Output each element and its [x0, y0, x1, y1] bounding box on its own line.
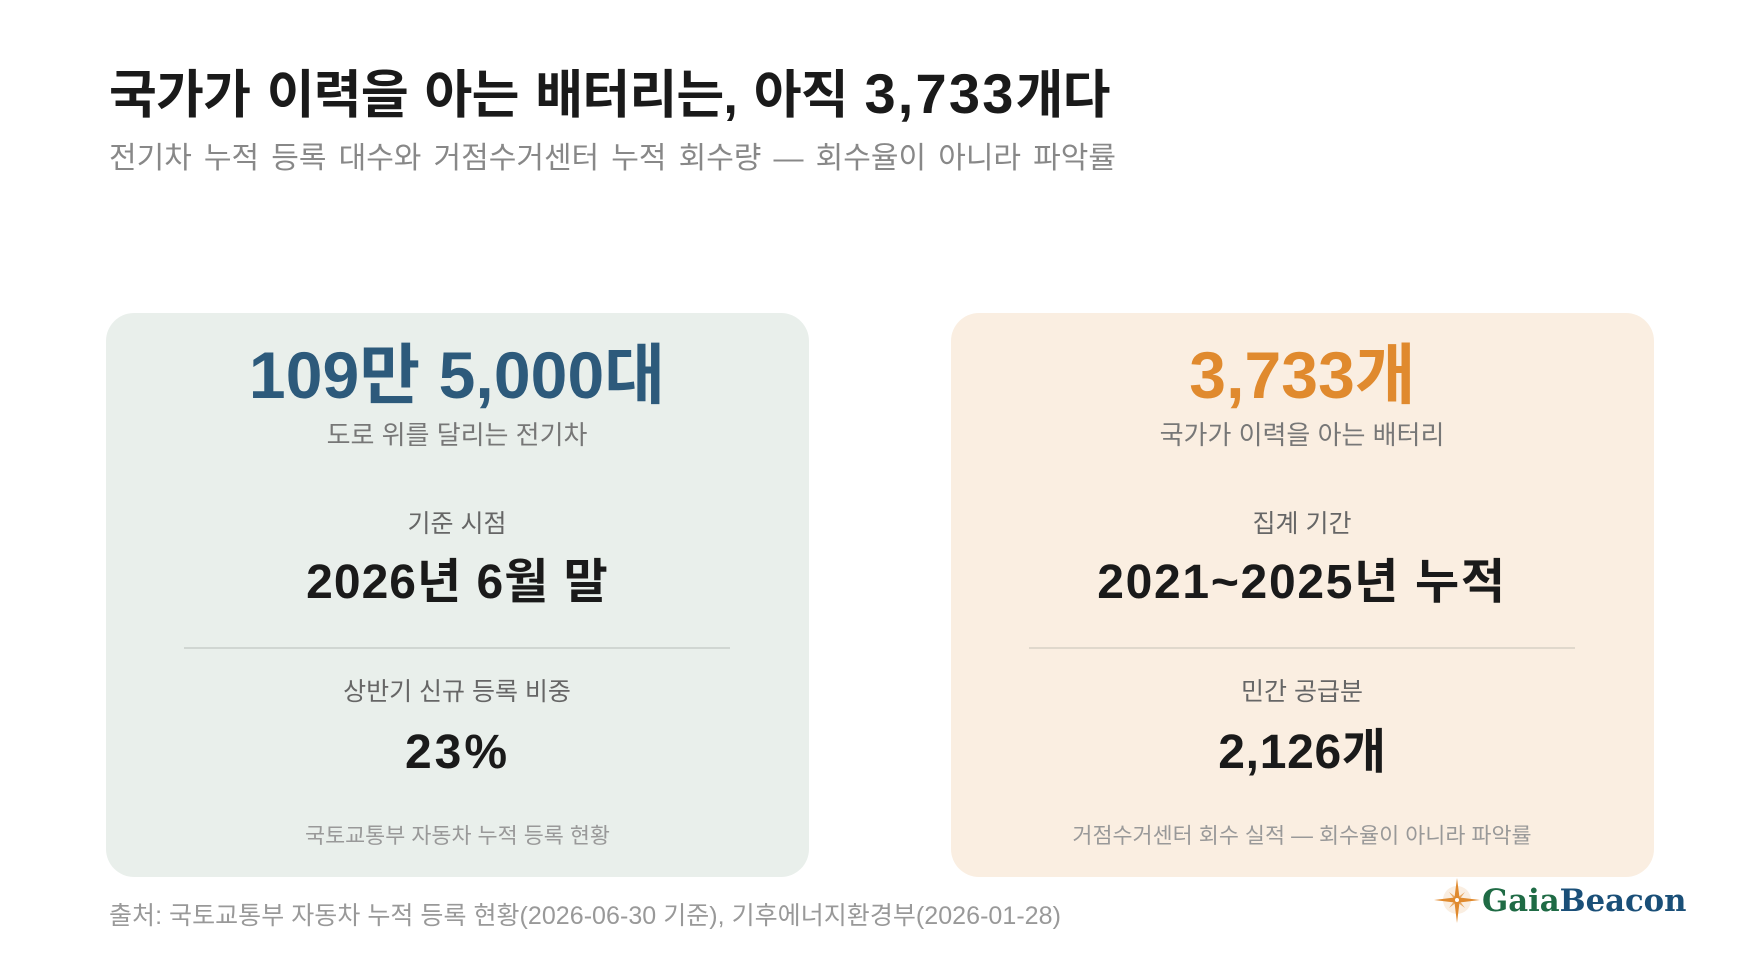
- panel: registered EVs: [106, 313, 809, 877]
- value: new registration share: 23%: [405, 726, 510, 779]
- subtitle: 전기차 누적 등록 대수와 거점수거센터 누적 회수량 — 회수율이 아니라 파악률: [109, 142, 1116, 175]
- caption: EVs: 도로 위를 달리는 전기차: [327, 420, 587, 450]
- wordmark: GaiaBeacon: [1482, 883, 1686, 919]
- value: period: 2021~2025년 누적: [1097, 556, 1507, 609]
- value: reference date: 2026년 6월 말: [306, 556, 609, 609]
- label: private supply: 민간 공급분: [1241, 678, 1363, 706]
- note: battery source: 거점수거센터 회수 실적 — 회수율이 아니라 파악률: [1072, 823, 1532, 848]
- panel: known batteries: [951, 313, 1654, 877]
- logo: [1434, 878, 1686, 923]
- label: reference date: 기준 시점: [408, 510, 506, 538]
- label: new registration share: 상반기 신규 등록 비중: [343, 678, 571, 706]
- icon: star: [1434, 878, 1480, 923]
- value: private supply: 2,126개: [1218, 726, 1387, 779]
- note: EV source: 국토교통부 자동차 누적 등록 현황: [305, 823, 610, 848]
- big number: batteries: 3,733개: [1189, 338, 1416, 412]
- source line: 출처: 국토교통부 자동차 누적 등록 현황(2026-06-30 기준), 기후에너지환경부(2026-01-28): [109, 902, 1061, 930]
- title: 국가가 이력을 아는 배터리는, 아직 3,733개다: [109, 62, 1110, 125]
- label: period: 집계 기간: [1253, 510, 1351, 538]
- big number: EVs: 109만 5,000대: [249, 338, 665, 412]
- caption: batteries: 국가가 이력을 아는 배터리: [1160, 420, 1444, 450]
